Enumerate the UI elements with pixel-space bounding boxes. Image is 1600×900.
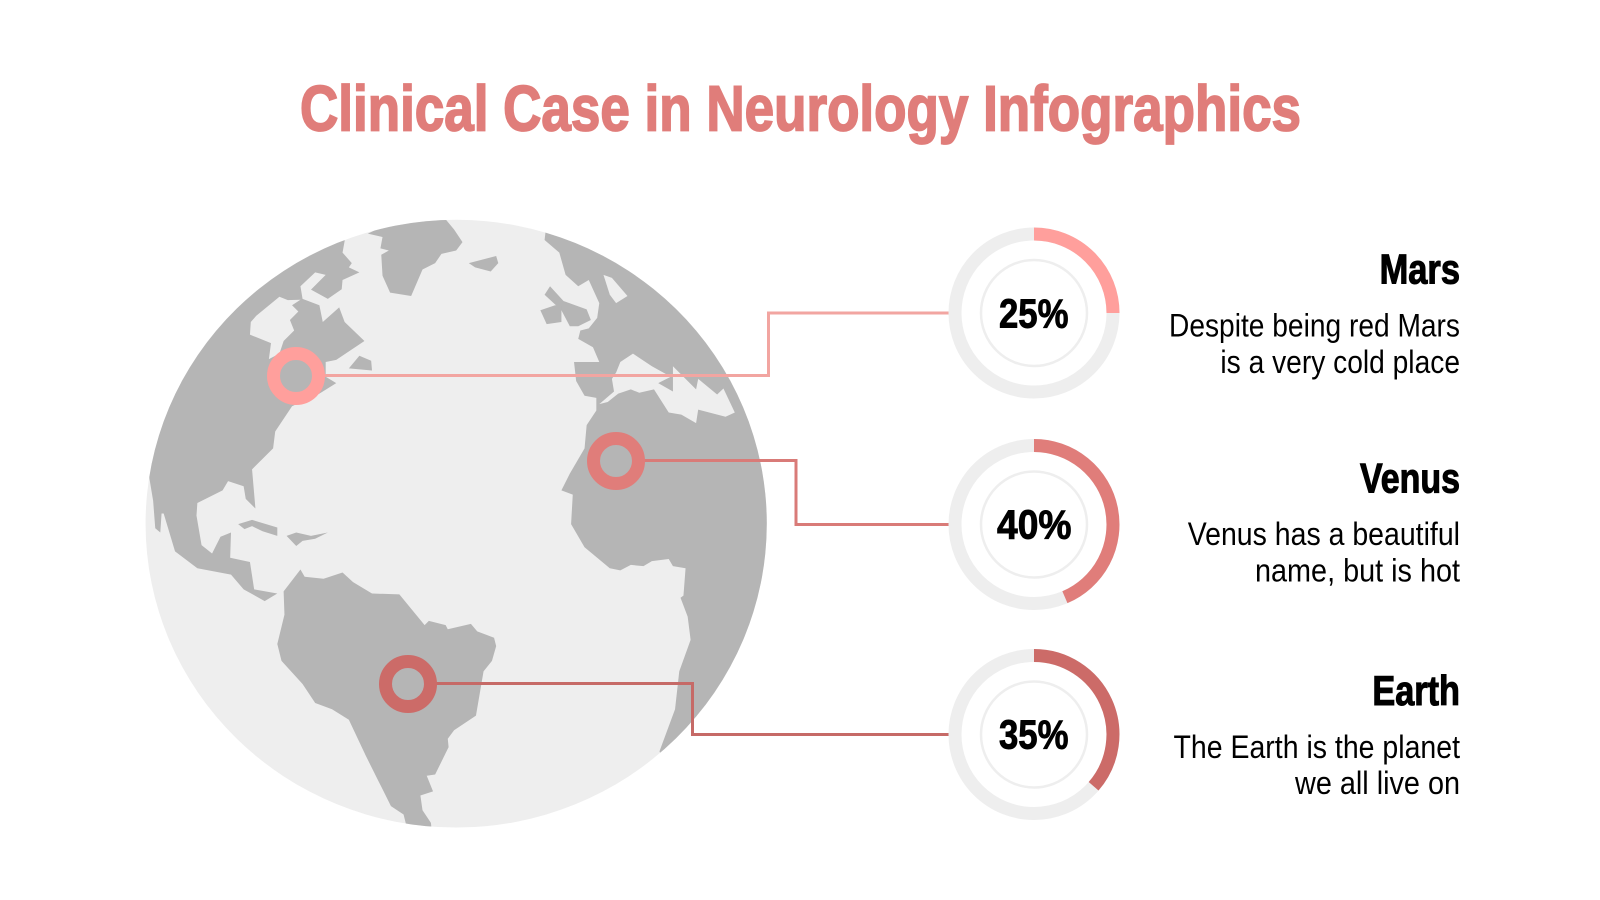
text block: Earth: we all live on: [1294, 765, 1460, 801]
text block: Mars: Despite being red Mars: [1169, 308, 1460, 344]
title: Clinical Case in Neurology Infographics: [300, 72, 1301, 144]
globe map: [146, 220, 767, 828]
connector: Venus: [640, 460, 949, 524]
text block: Earth: Earth: [1372, 667, 1460, 714]
marker: Venus: [594, 438, 638, 484]
percent: 25%: 25%: [999, 290, 1068, 336]
text block: Venus: Venus: [1360, 454, 1460, 502]
donut: Earth 35%: [955, 656, 1113, 814]
donut: Venus 40%: [955, 446, 1113, 604]
text block: Venus: Venus has a beautiful: [1188, 516, 1460, 552]
text block: Venus: [1188, 454, 1460, 588]
text block: Mars: Mars: [1380, 246, 1460, 292]
text block: Earth: The Earth is the planet: [1174, 729, 1460, 765]
donut: Mars 25%: [955, 234, 1113, 392]
text block: Venus: name, but is hot: [1255, 552, 1460, 588]
marker: Mars: [274, 354, 318, 398]
percent: 40%: 40%: [997, 502, 1072, 548]
text block: Mars: [1169, 246, 1460, 380]
text block: Mars: is a very cold place: [1220, 344, 1460, 380]
percent: 35%: 35%: [999, 712, 1068, 758]
connector: Mars: [322, 313, 949, 376]
connector: Earth: [432, 684, 949, 734]
text block: Earth: [1174, 667, 1460, 801]
marker: Earth: [386, 662, 430, 706]
